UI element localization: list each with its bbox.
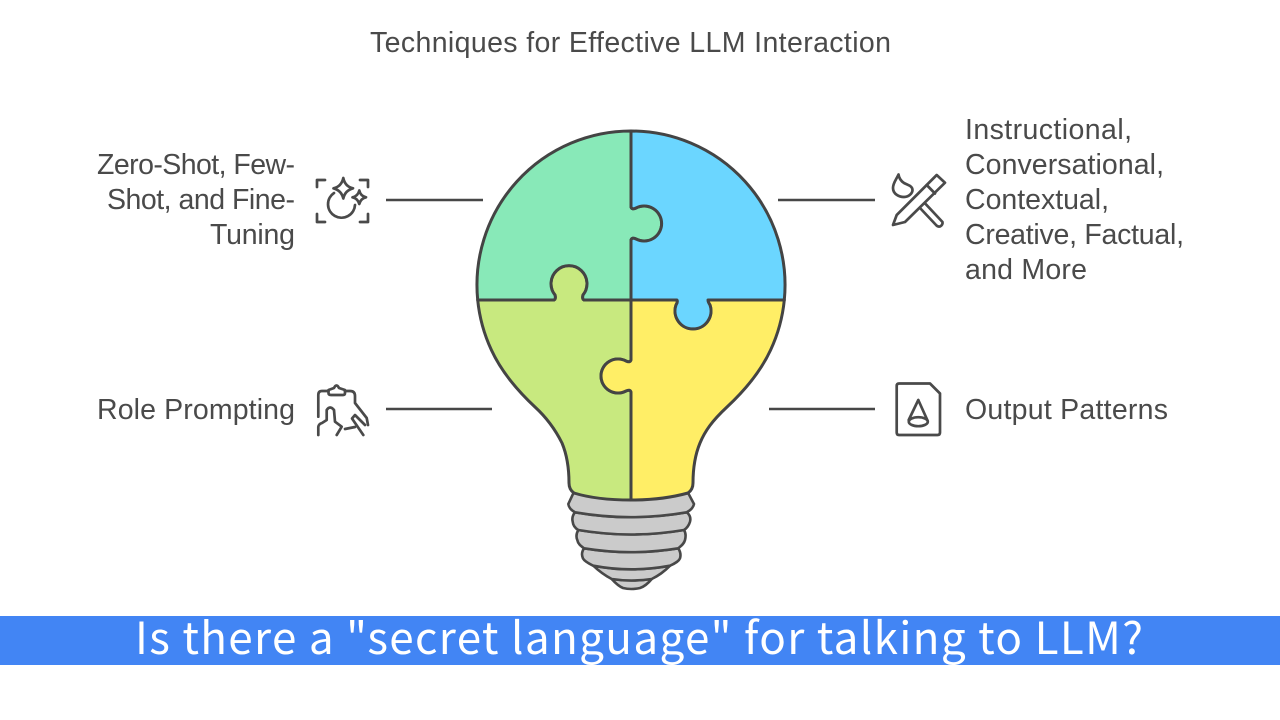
text: instructional and other prompt types: and More [965,254,1087,286]
connector: lower left [386,408,492,410]
text: zero-shot, few-shot, fine-tuning: Zero-Shot, Few- [97,149,295,181]
bulb screw base [568,493,694,589]
text: role prompting: Role Prompting [97,394,295,426]
text: instructional and other prompt types: Creative, Factual, [965,219,1184,251]
title: Techniques for Effective LLM Interaction [370,27,891,59]
icon: sparkles and moon in frame [317,178,368,222]
text: zero-shot, few-shot, fine-tuning: Shot, and Fine- [107,184,295,216]
text: instructional and other prompt types: Instructional, [965,114,1132,146]
text: output patterns: Output Patterns [965,394,1168,426]
text: instructional and other prompt types [965,114,1184,286]
puzzle piece: blue upper right [631,131,785,329]
puzzle piece: lime lower left [478,266,631,500]
icon: document with cone [897,384,940,435]
connector: lower right [769,408,875,410]
icon: pen and brush [893,174,945,227]
text: zero-shot, few-shot, fine-tuning [97,149,295,251]
connector: upper right [778,199,875,201]
text: zero-shot, few-shot, fine-tuning: Tuning [210,219,295,251]
text: instructional and other prompt types: Contextual, [965,184,1109,216]
text: instructional and other prompt types: Conversational, [965,149,1164,181]
caption text: Is there a "secret language" for talking to LLM? [135,603,1143,667]
puzzle piece: green upper left [477,131,662,300]
caption banner [0,603,1280,667]
puzzle piece: yellow lower right [601,300,784,500]
connector: upper left [386,199,483,201]
light bulb puzzle [477,131,785,589]
icon: clipboard and hands [318,386,368,435]
